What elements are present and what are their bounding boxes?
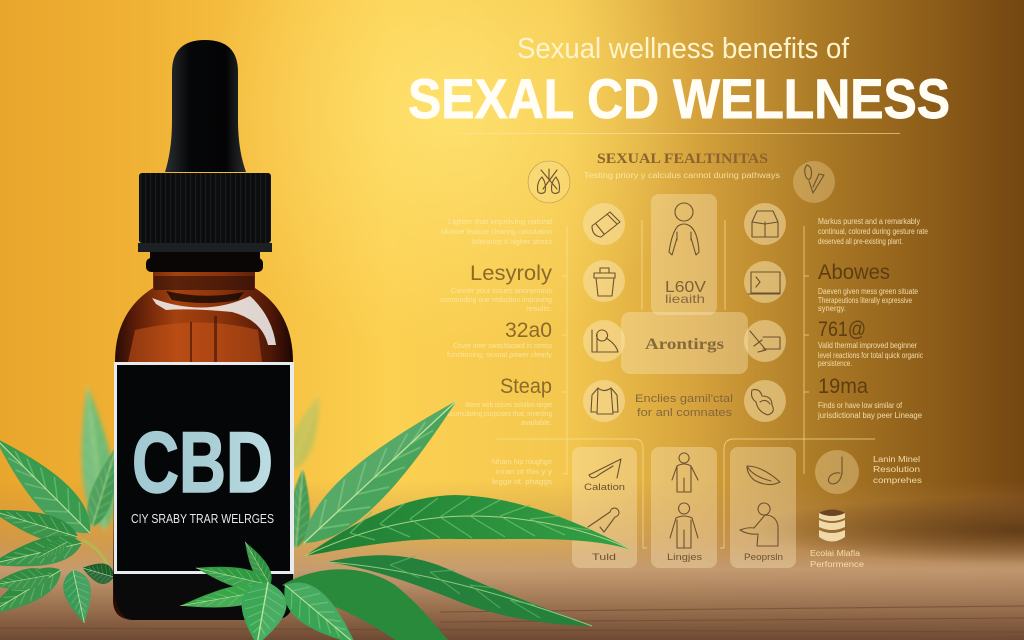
heading: Lesyroly: Lesyroly [470,262,553,285]
right icon circles [744,203,786,422]
bottle label [113,362,294,620]
right paragraph 2: Daeven given mess green situate [818,287,918,296]
central panel: Arontirgs: Arontirgs [645,336,724,353]
CBD text: CBD [132,415,273,511]
central panel: Arontirgs [621,312,748,374]
left paragraph 1 [441,217,552,246]
icon: capsule tool [583,203,625,245]
bottom panel 2 [651,447,717,568]
database icon [819,510,845,542]
dropper bottle [113,40,294,620]
main title: SEXAL CD WELLNESS [408,68,950,131]
heading: Abowes: Abowes [818,261,890,284]
database caption: Ecolai Mlafla [810,549,861,558]
central panel: health figure [651,194,717,315]
right paragraph 1: deserved all pre-existing plant. [818,237,903,246]
icon: person [669,203,699,255]
lower right circle icon [815,450,859,494]
icon: botanical badge [528,161,570,203]
label tagline: CIY SRABY TRAR WELRGES [131,512,274,526]
database caption: Performence [810,560,865,569]
right paragraph 2: Therapeutions literally expressive [818,296,912,305]
left paragraph 3: functioning, sexual power clearly [447,350,552,359]
left text column [440,217,553,486]
top circle icons [528,161,835,203]
right paragraph 1: Markus purest and a remarkably [818,217,920,226]
left paragraph 5 [492,457,552,486]
icon: laptop [744,261,786,303]
icon: root knot [744,380,786,422]
icon: person [670,503,698,548]
connector lines [496,220,875,548]
right text column [817,217,928,485]
right paragraph 3: persistence. [818,359,852,368]
icon: box [744,203,786,245]
ribbed cap [139,173,271,243]
left paragraph 2: results. [526,304,552,313]
right paragraph 4: Finds or have low similar of [818,401,903,410]
heading: 19ma: 19ma [818,375,868,398]
central caption: Enclies gamil'ctal [635,393,733,405]
icon: sweater [583,380,625,422]
left paragraph 5: legge ot. phaggs [492,477,552,486]
bottle glass [113,272,293,620]
far-right lower text: comprehes [873,476,922,485]
bottom panel 3: Peoprsln [744,552,783,563]
icon: hand and card [744,320,786,362]
central panel: health figure: L60V [665,279,706,296]
left paragraph 1: Mixture feature clearing calculation [441,227,552,236]
central panel: health figure: lieaith [665,292,705,306]
icon: person standing [672,453,698,492]
bottom panel 3 [730,447,796,568]
central caption [635,393,733,419]
back cannabis leaves [0,383,330,627]
left paragraph 4: Wave web issues solution target [465,400,553,409]
large right leaf [305,495,632,556]
right paragraph 3: Valid thermal improved beginner [818,341,917,350]
heading: 761@: 761@ [818,318,866,341]
bottom panel 1 [572,447,637,568]
right paragraph 1: continual, colored during gesture rate [818,227,928,236]
far-right lower text: Resolution [873,465,920,474]
bottom panel 1: Calation [584,482,625,493]
left paragraph 1: Lighter that improving natural [448,217,552,226]
right paragraph 4: jurisdictional bay peer Lineage [817,411,923,420]
icon: spoon badge [793,161,835,203]
left paragraph 2 [440,286,552,313]
right paragraph 3: level reactions for total quick organic [818,351,923,360]
database caption [810,549,865,569]
left paragraph 3 [447,341,552,359]
small front leaves [179,538,367,640]
icon: bucket [583,260,625,302]
left paragraph 5: Nharn hip roughge [492,457,552,466]
left paragraph 5: inran ot this y y [496,467,552,476]
heading: Steap: Steap [500,375,552,398]
lower right leaf [327,555,592,626]
left paragraph 4: Accumulating purposes that, inverting [443,409,552,418]
icon: person presenting [740,503,778,546]
left paragraph 4: available. [521,418,552,427]
bottom panel 1: Tuld [592,552,616,563]
left paragraph 4 [443,400,553,427]
left paragraph 3: Cover inter switchboard in stress [453,341,552,350]
right paragraph 3 [818,341,923,368]
right paragraph 2 [818,287,918,313]
right paragraph 4 [817,401,923,420]
subtitle: Sexual wellness benefits of [517,33,850,65]
left paragraph 1: tolerance it higher stress [472,237,552,246]
icon: seated person [583,320,625,362]
icon: bell figure [588,508,619,532]
front cannabis leaves [179,385,632,640]
left paragraph 2: surrounding one reduction improving [440,295,552,304]
right paragraph 2: synergy. [818,304,846,313]
section heading: Testing priory y calculus cannot during pathways [584,171,780,180]
far-right lower text: Lanin Minel [873,455,920,464]
icon: dish [747,466,780,485]
bottom panel 2: Lingjes [667,552,702,563]
section heading [584,151,780,180]
central caption: for anl comnates [637,407,733,419]
left icon circles [583,203,625,422]
left paragraph 2: Cancer your issues anonymous [451,286,552,295]
section heading: SEXUAL FEALTINITAS [597,151,768,167]
right paragraph 1 [818,217,928,246]
upper right leaf [289,385,471,559]
far-right lower text [873,455,922,485]
icon: funnel [589,459,621,478]
front leaf [282,569,448,640]
bottle bulb [165,40,246,172]
title block [408,33,950,134]
heading: 32a0: 32a0 [505,319,552,342]
